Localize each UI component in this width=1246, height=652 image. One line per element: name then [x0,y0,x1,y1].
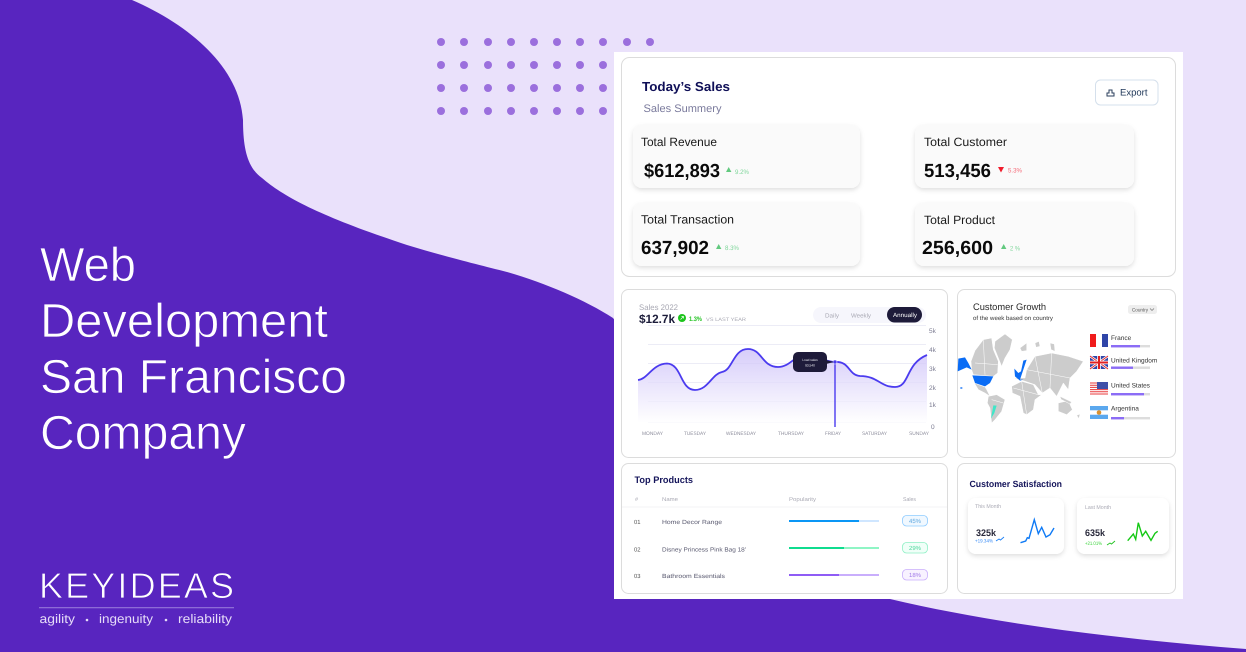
table header: Popularity [789,497,816,503]
period toggle: Daily [825,312,839,320]
x axis labels [642,431,930,437]
card: last month: 635k [1085,528,1106,539]
row: home decor range: Home Decor Range [662,519,723,526]
card: total product: 256,600 [922,238,993,259]
line chart [638,326,937,437]
y axis labels: 5k [929,328,937,335]
dot pattern [437,38,654,115]
logo: Keyideas: reliability [178,612,233,626]
dashboard white panel [614,52,1183,599]
card: total revenue [633,125,860,188]
table header: # [635,497,639,503]
panel: today's sales [622,58,1176,276]
card: total revenue: $612,893 [644,161,720,182]
title: Development [40,295,328,348]
y axis labels: 2k [929,385,937,392]
flag: United Kingdom [1090,356,1108,369]
card: total customer [915,125,1134,188]
title: Company [40,407,246,460]
period toggle [813,307,926,323]
row: disney princess pink bag: 02 [634,546,641,554]
customer growth heading: Customer Growth [973,302,1046,313]
x axis labels: SATURDAY [862,431,888,437]
sales header [639,303,746,326]
x axis labels: MONDAY [642,431,664,437]
row: bathroom essentials [634,570,928,580]
row: home decor range: 45% [909,518,922,525]
top products heading: Top Products [634,475,693,486]
flag: France [1090,334,1108,347]
United Kingdom row: United Kingdom [1111,358,1157,364]
United States row: United States [1111,382,1151,390]
country dropdown: Country [1132,308,1148,314]
card: this month: 325k [976,528,997,539]
card: total transaction: 637,902 [641,238,709,259]
card: total customer: 5.3% [1008,168,1022,174]
row: disney princess pink bag [634,542,928,554]
logo: Keyideas: KEYIDEAS [39,565,234,606]
card: this month: This Month [975,504,1001,510]
panel: customer growth [958,290,1176,458]
panel: sales chart [622,290,948,458]
Argentina row [1111,406,1150,419]
card: last month: Last Month [1085,505,1111,511]
title [40,239,347,460]
chart tooltip [793,352,834,372]
sales header: 1.3% [689,316,702,323]
card: total customer: Total Customer [924,135,1007,149]
card: total transaction [633,203,860,266]
x axis labels: THURSDAY [778,431,805,437]
sales header: VS LAST YEAR [706,317,746,323]
card: this month: +19.34% [975,538,993,544]
card: total customer: 513,456 [924,161,991,182]
country dropdown [1128,305,1157,314]
sales header: Sales 2022 [639,303,679,312]
logo: Keyideas: agility [40,612,76,626]
period toggle: Annually [893,312,917,319]
y axis labels: 0 [931,424,935,431]
card: total transaction: Total Transaction [641,212,734,226]
export button [1096,80,1158,105]
row: disney princess pink bag: 29% [909,545,922,552]
card: total revenue: Total Revenue [641,135,717,149]
flag: United States [1090,382,1108,396]
y axis labels [929,328,937,431]
y axis labels: 1k [929,402,937,409]
sales header: $12.7k [639,312,675,326]
period toggle: Weekly [851,312,871,320]
row: disney princess pink bag: Disney Princess Pink Bag 18' [662,546,746,554]
row: bathroom essentials: Bathroom Essentials [662,573,725,580]
chart tooltip: Load sales [802,358,818,362]
card: this month [968,498,1064,554]
United States row [1111,382,1151,395]
x axis labels: SUNDAY [909,431,930,437]
x axis labels: TUESDAY [684,431,707,437]
logo: Keyideas [39,565,234,626]
customer growth heading [973,302,1053,322]
table header: Sales [903,497,916,503]
world map [958,334,1083,423]
subheading: sales summary: Sales Summery [644,103,722,115]
row: bathroom essentials: 18% [909,572,922,579]
card: total transaction: 8.3% [725,245,739,252]
panel: top products [622,464,948,594]
card: total product: 2 % [1010,246,1020,252]
logo: Keyideas: ingenuity [99,612,154,626]
France row [1111,335,1150,347]
table header: Name [662,497,678,503]
table header [622,497,947,507]
row: home decor range [634,516,928,526]
card: total product [915,203,1134,266]
customer growth heading: of the week based on country [973,315,1053,322]
title: San Francisco [40,351,347,404]
row: home decor range: 01 [634,519,641,526]
title: Web [40,239,136,292]
y axis labels: 4k [929,347,937,354]
x axis labels: FRIDAY [825,431,842,437]
card: last month: +21.01% [1085,541,1102,547]
United Kingdom row [1111,358,1157,369]
customer satisfaction heading: Customer Satisfaction [970,479,1062,489]
flag: Argentina [1090,406,1108,419]
export button: Export [1120,88,1148,98]
heading: today's sales: Today’s Sales [642,79,730,94]
card: total product: Total Product [924,213,996,227]
panel: customer satisfaction [958,464,1176,594]
France row: France [1111,335,1132,342]
card: total revenue: 9.2% [735,169,749,176]
chart tooltip: $3,540 [805,364,815,368]
Argentina row: Argentina [1111,406,1139,412]
x axis labels: WEDNESDAY [726,431,757,437]
y axis labels: 3k [929,366,937,373]
row: bathroom essentials: 03 [634,573,641,580]
card: last month [1077,498,1169,554]
